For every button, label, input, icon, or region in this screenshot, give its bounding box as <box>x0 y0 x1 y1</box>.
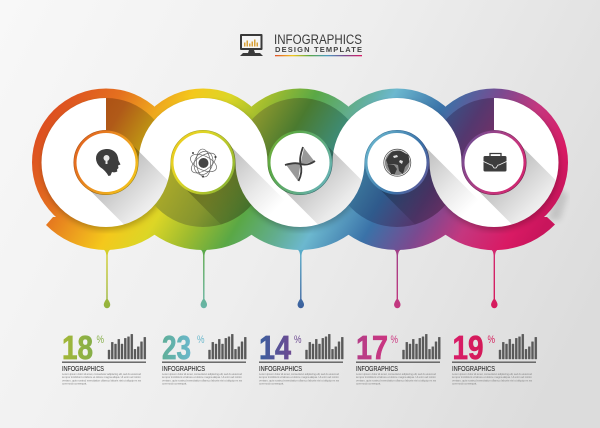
stat 2 <box>162 330 246 386</box>
dark inner discs <box>42 98 558 227</box>
description: veniam, quis nostrud exercitation ullamco laboris nisi ut aliquip ex ea <box>452 378 532 382</box>
icon circles <box>74 130 526 194</box>
percent sign: % <box>197 334 205 346</box>
description: Lorem ipsum dolor sit amet, consectetur adipiscing elit, sed do eiusmod <box>356 372 436 376</box>
shadow 4 <box>380 146 471 224</box>
description: veniam, quis nostrud exercitation ullamco laboris nisi ut aliquip ex ea <box>162 378 242 382</box>
rainbow underline <box>275 55 362 56</box>
outer ribbon lobes <box>32 88 568 250</box>
drip 1 <box>103 249 111 308</box>
description: tempor incididunt ut labore et dolore magna aliqua. Ut enim ad minim <box>162 375 243 379</box>
header logo <box>240 32 362 56</box>
circle 2 with atom icon <box>171 130 235 194</box>
soft ribbon shadow <box>548 185 568 220</box>
label: INFOGRAPHICS <box>62 366 104 373</box>
description: commodo consequat. <box>259 382 284 386</box>
description: Lorem ipsum dolor sit amet, consectetur adipiscing elit, sed do eiusmod <box>162 372 242 376</box>
divider <box>452 362 536 363</box>
drip 4 <box>394 249 402 308</box>
heading: design template: DESIGN TEMPLATE <box>275 45 362 54</box>
icon: globe <box>384 149 411 176</box>
icon: head with light bulb <box>96 149 120 176</box>
drip 2 <box>200 249 208 308</box>
shadow 3 <box>283 146 362 224</box>
icon: briefcase <box>484 154 506 172</box>
divider <box>62 362 146 363</box>
circle 5 with briefcase icon <box>462 130 526 194</box>
circle 3 with dna icon <box>268 130 332 194</box>
white band shadow <box>58 117 543 214</box>
percent sign: % <box>488 334 495 346</box>
bar chart <box>499 334 537 359</box>
description: commodo consequat. <box>162 382 187 386</box>
percent sign: % <box>294 334 302 346</box>
divider <box>356 362 440 363</box>
description <box>356 372 437 386</box>
icon: computer monitor <box>240 34 263 56</box>
description: tempor incididunt ut labore et dolore magna aliqua. Ut enim ad minim <box>259 375 340 379</box>
drip connectors <box>103 249 498 308</box>
divider <box>259 362 343 363</box>
long shadows <box>89 146 556 224</box>
description: commodo consequat. <box>356 382 381 386</box>
rainbow ribbon <box>32 88 568 250</box>
number 18: 18 <box>62 330 93 367</box>
description <box>62 372 142 386</box>
drip 5 <box>490 249 498 308</box>
label: INFOGRAPHICS <box>162 366 205 373</box>
white S band <box>57 114 542 211</box>
stat 4 <box>356 330 440 386</box>
percent sign: % <box>96 334 104 346</box>
circle 1 with head icon <box>74 130 138 194</box>
shadow 5 <box>477 146 556 224</box>
bar chart <box>306 334 343 359</box>
bar chart <box>108 334 146 359</box>
description: commodo consequat. <box>452 382 477 386</box>
description: Lorem ipsum dolor sit amet, consectetur adipiscing elit, sed do eiusmod <box>259 372 339 376</box>
label: INFOGRAPHICS <box>452 366 495 373</box>
label: INFOGRAPHICS <box>259 366 302 373</box>
number 23: 23 <box>162 330 191 367</box>
description: veniam, quis nostrud exercitation ullamco laboris nisi ut aliquip ex ea <box>62 378 141 382</box>
description: tempor incididunt ut labore et dolore magna aliqua. Ut enim ad minim <box>452 375 533 379</box>
icon: atom <box>188 148 219 178</box>
description: tempor incididunt ut labore et dolore magna aliqua. Ut enim ad minim <box>356 375 437 379</box>
description <box>162 372 243 386</box>
shadow 1 <box>89 146 168 224</box>
bar chart <box>402 334 440 359</box>
divider <box>162 362 246 363</box>
percent sign: % <box>390 334 398 346</box>
description: Lorem ipsum dolor sit amet, consectetur adipiscing elit, sed do eiusmod <box>62 372 141 376</box>
heading: infographics: INFOGRAPHICS <box>274 32 362 47</box>
drip 3 <box>297 249 305 308</box>
stat 1 <box>62 330 146 386</box>
stat 5 <box>452 330 537 386</box>
number 17: 17 <box>356 330 388 367</box>
shadow 2 <box>186 146 277 224</box>
description: veniam, quis nostrud exercitation ullamco laboris nisi ut aliquip ex ea <box>259 378 339 382</box>
description: veniam, quis nostrud exercitation ullamco laboris nisi ut aliquip ex ea <box>356 378 436 382</box>
description: commodo consequat. <box>62 382 87 386</box>
number 19: 19 <box>452 330 484 367</box>
bar chart <box>208 334 246 359</box>
stat 3 <box>259 330 343 386</box>
description <box>259 372 340 386</box>
description: Lorem ipsum dolor sit amet, consectetur adipiscing elit, sed do eiusmod <box>452 372 532 376</box>
description: tempor incididunt ut labore et dolore magna aliqua. Ut enim ad minim <box>62 375 142 379</box>
icon: dna helix <box>285 147 315 181</box>
circle 4 with globe icon <box>365 130 429 194</box>
label: INFOGRAPHICS <box>356 366 398 373</box>
number 14: 14 <box>259 330 291 367</box>
description <box>452 372 533 386</box>
